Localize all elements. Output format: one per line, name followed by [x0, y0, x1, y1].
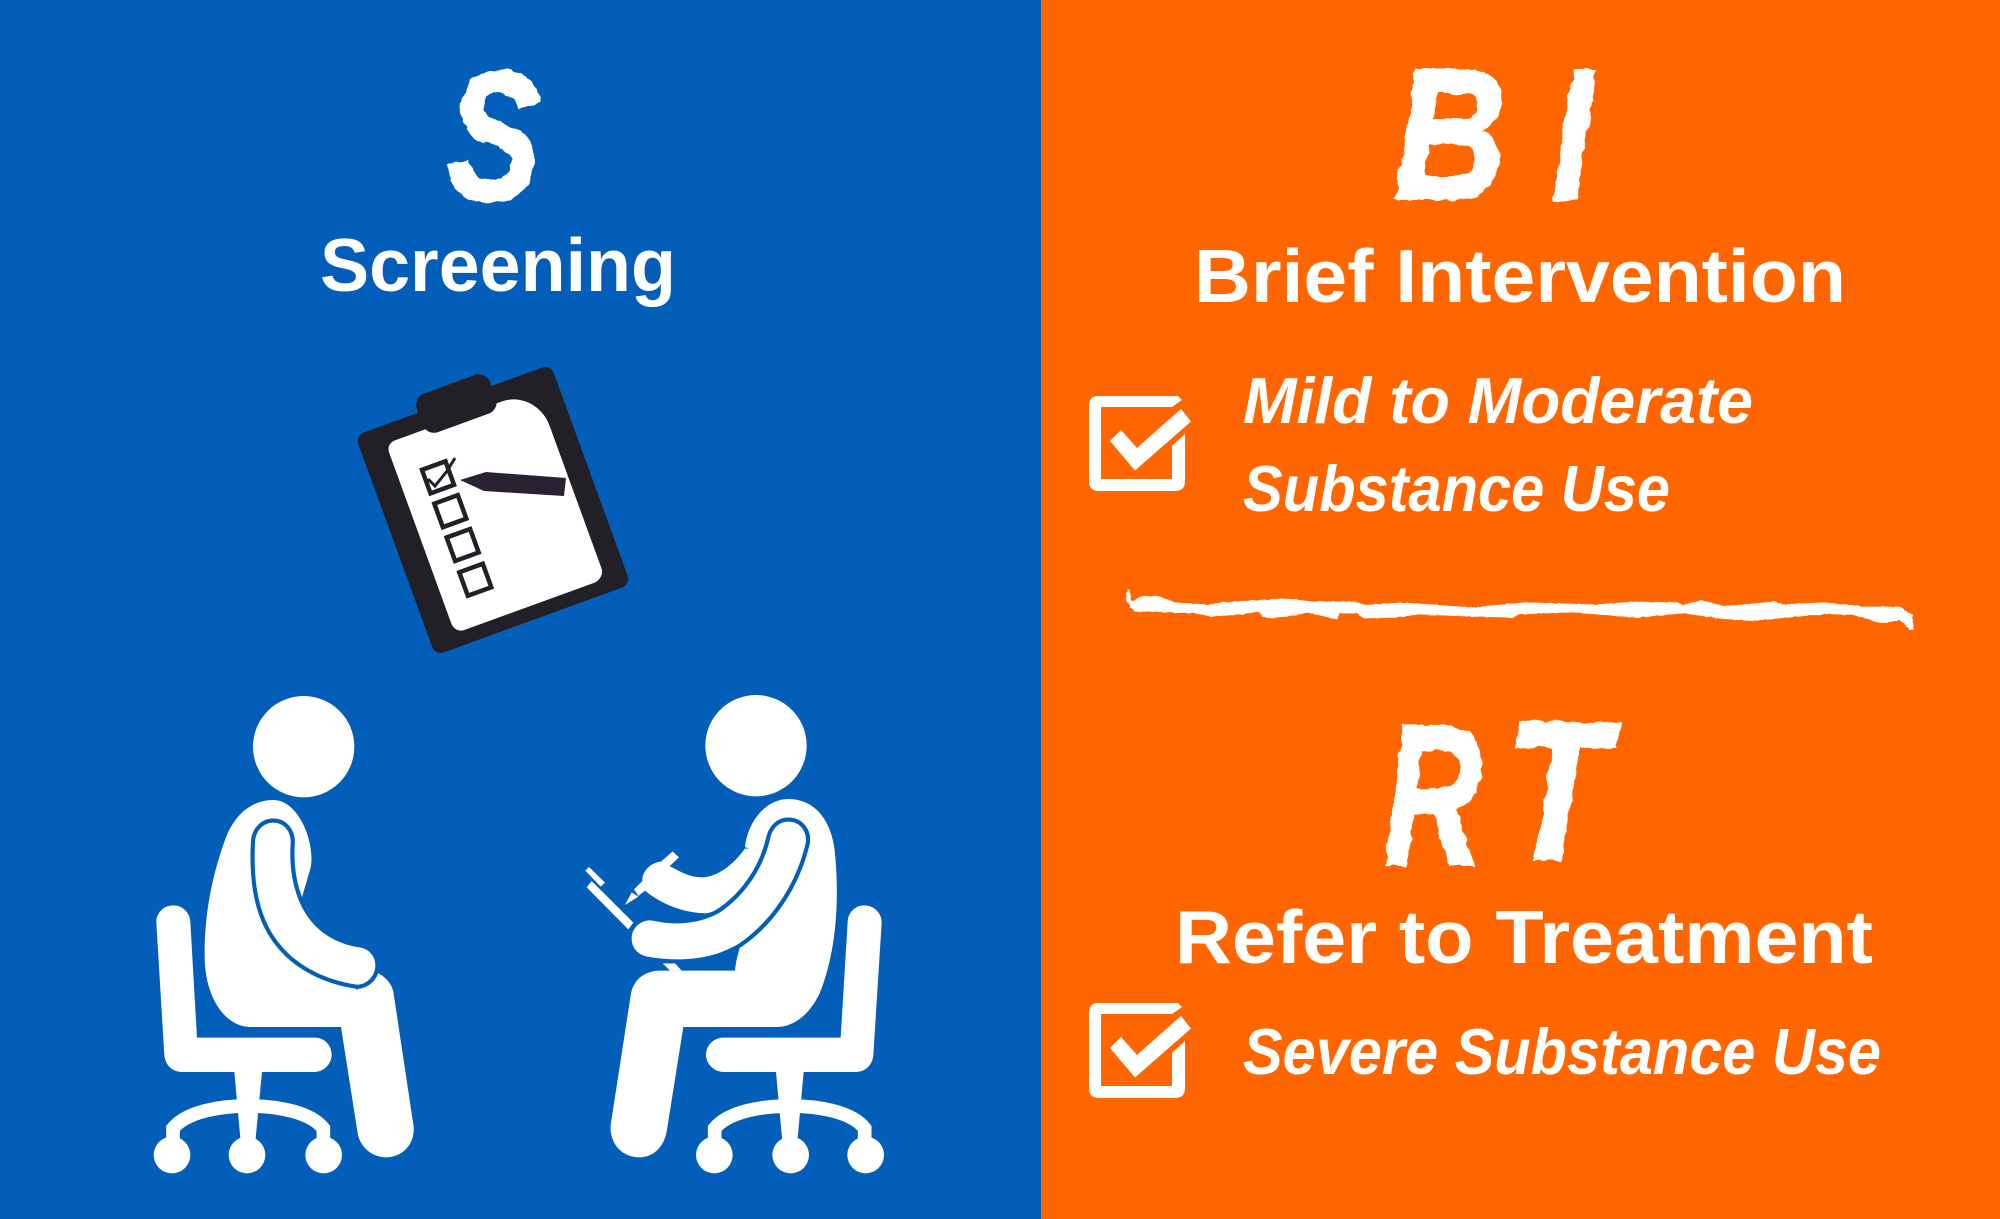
icon: seated client: [154, 696, 414, 1173]
icon: checkbox severe: [1089, 1003, 1191, 1098]
brush letter T: T: [1506, 681, 1619, 902]
heading: Refer to Treatment: Refer to Treatment: [1175, 895, 1873, 979]
brush letter S: S: [448, 34, 540, 238]
brush letter I: I: [1552, 32, 1595, 239]
heading: Brief Intervention: Brief Intervention: [1194, 234, 1846, 318]
icon: checkbox mild to moderate: [1089, 396, 1191, 491]
panel: screening: [0, 0, 1041, 1219]
brush letter B: B: [1394, 31, 1506, 238]
text: mild to moderate substance use: Substance Use: [1243, 452, 1670, 525]
text: mild to moderate substance use: [1243, 364, 1753, 525]
panel: brief intervention and referral: [1041, 0, 2000, 1219]
heading: Screening: Screening: [320, 223, 676, 307]
brush letter R: R: [1384, 684, 1481, 907]
icon: seated clinician writing: [585, 695, 884, 1173]
text: mild to moderate substance use: Mild to Moderate: [1243, 364, 1753, 437]
icon: clipboard checklist: [350, 349, 631, 656]
text: severe substance use: Severe Substance Use: [1243, 1015, 1881, 1088]
